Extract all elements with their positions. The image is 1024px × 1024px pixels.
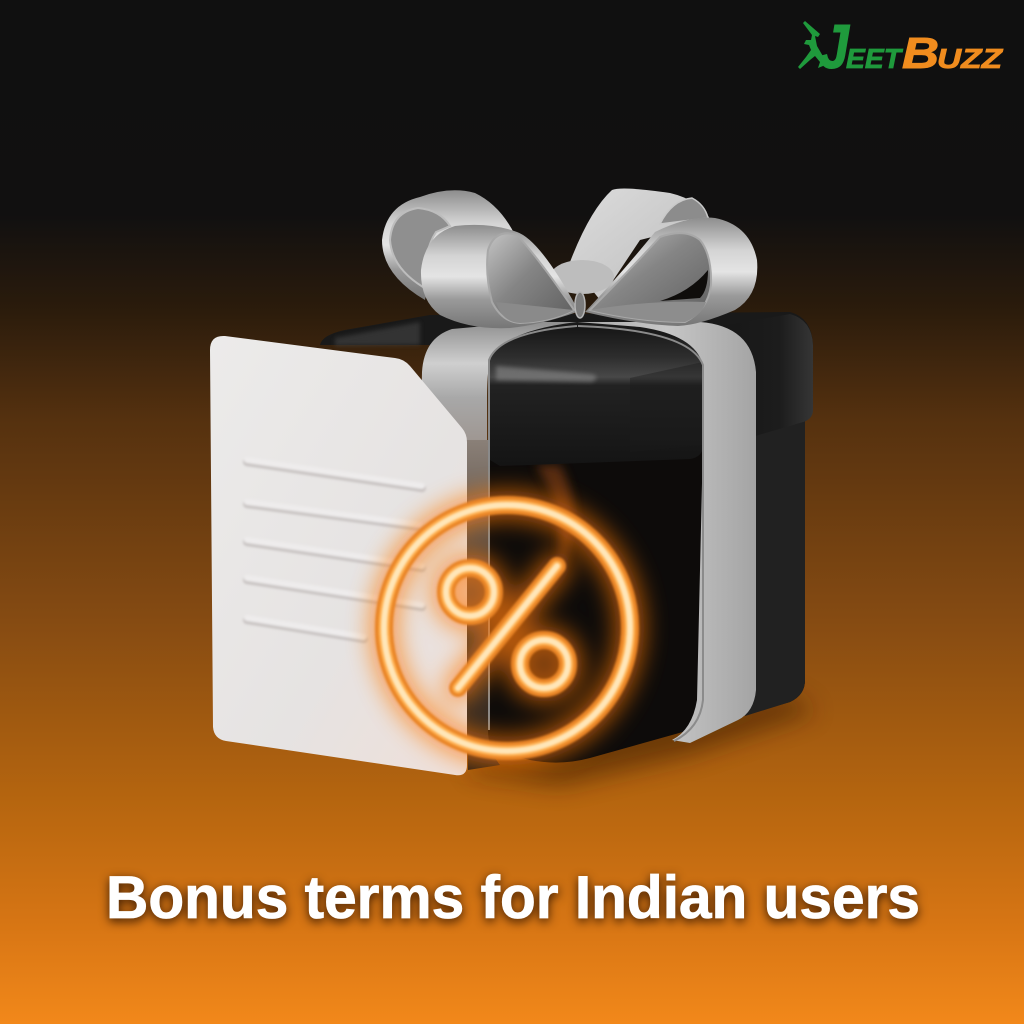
bow right front loop [585, 218, 757, 326]
lid right side [700, 314, 813, 452]
bow left back loop [382, 190, 515, 300]
ribbon right band [577, 322, 756, 743]
ribbon left band edge [489, 326, 577, 730]
logo wordmark green: J [819, 13, 850, 82]
logo wordmark orange capital: B [902, 29, 939, 78]
document sheet [210, 336, 467, 775]
bow right back loop [570, 189, 712, 300]
ribbon left band [420, 322, 577, 460]
ground shadow [470, 695, 815, 786]
neon mid tube [384, 505, 630, 751]
ribbon right band edge [578, 326, 703, 741]
bow knot [575, 292, 585, 318]
bow center lump [550, 260, 614, 294]
gift box [320, 189, 813, 770]
body inner reflection [535, 465, 574, 580]
logo wordmark orange small: UZZ [937, 43, 1003, 74]
bow right front inner [590, 233, 711, 322]
neon percent icon [384, 505, 630, 751]
title: Bonus terms for Indian users [106, 864, 920, 931]
ribbon left band lower [460, 440, 500, 770]
bow right hole [660, 270, 708, 301]
logo icon: cricketer [798, 21, 826, 69]
box body [488, 450, 805, 763]
logo wordmark green small: EET [846, 43, 904, 74]
neon orange tube [384, 505, 630, 751]
lid front face [490, 327, 703, 466]
bow right back loop inner [660, 198, 708, 224]
bow left front inner [487, 233, 574, 323]
neon bright core [384, 505, 630, 751]
bow left back loop inner [390, 208, 450, 287]
document [210, 336, 467, 775]
neon outer glow [384, 505, 630, 751]
lid front divide [630, 362, 703, 452]
lid top back [320, 312, 813, 447]
bow right lower fold [590, 302, 706, 322]
bow left front loop [421, 225, 577, 328]
box body right side [745, 415, 805, 716]
lid highlight [496, 366, 597, 382]
bow left lower fold [496, 302, 574, 323]
logo: JeetBuzz [798, 13, 1003, 82]
document text lines [247, 460, 422, 639]
lid back highlight [335, 322, 420, 346]
